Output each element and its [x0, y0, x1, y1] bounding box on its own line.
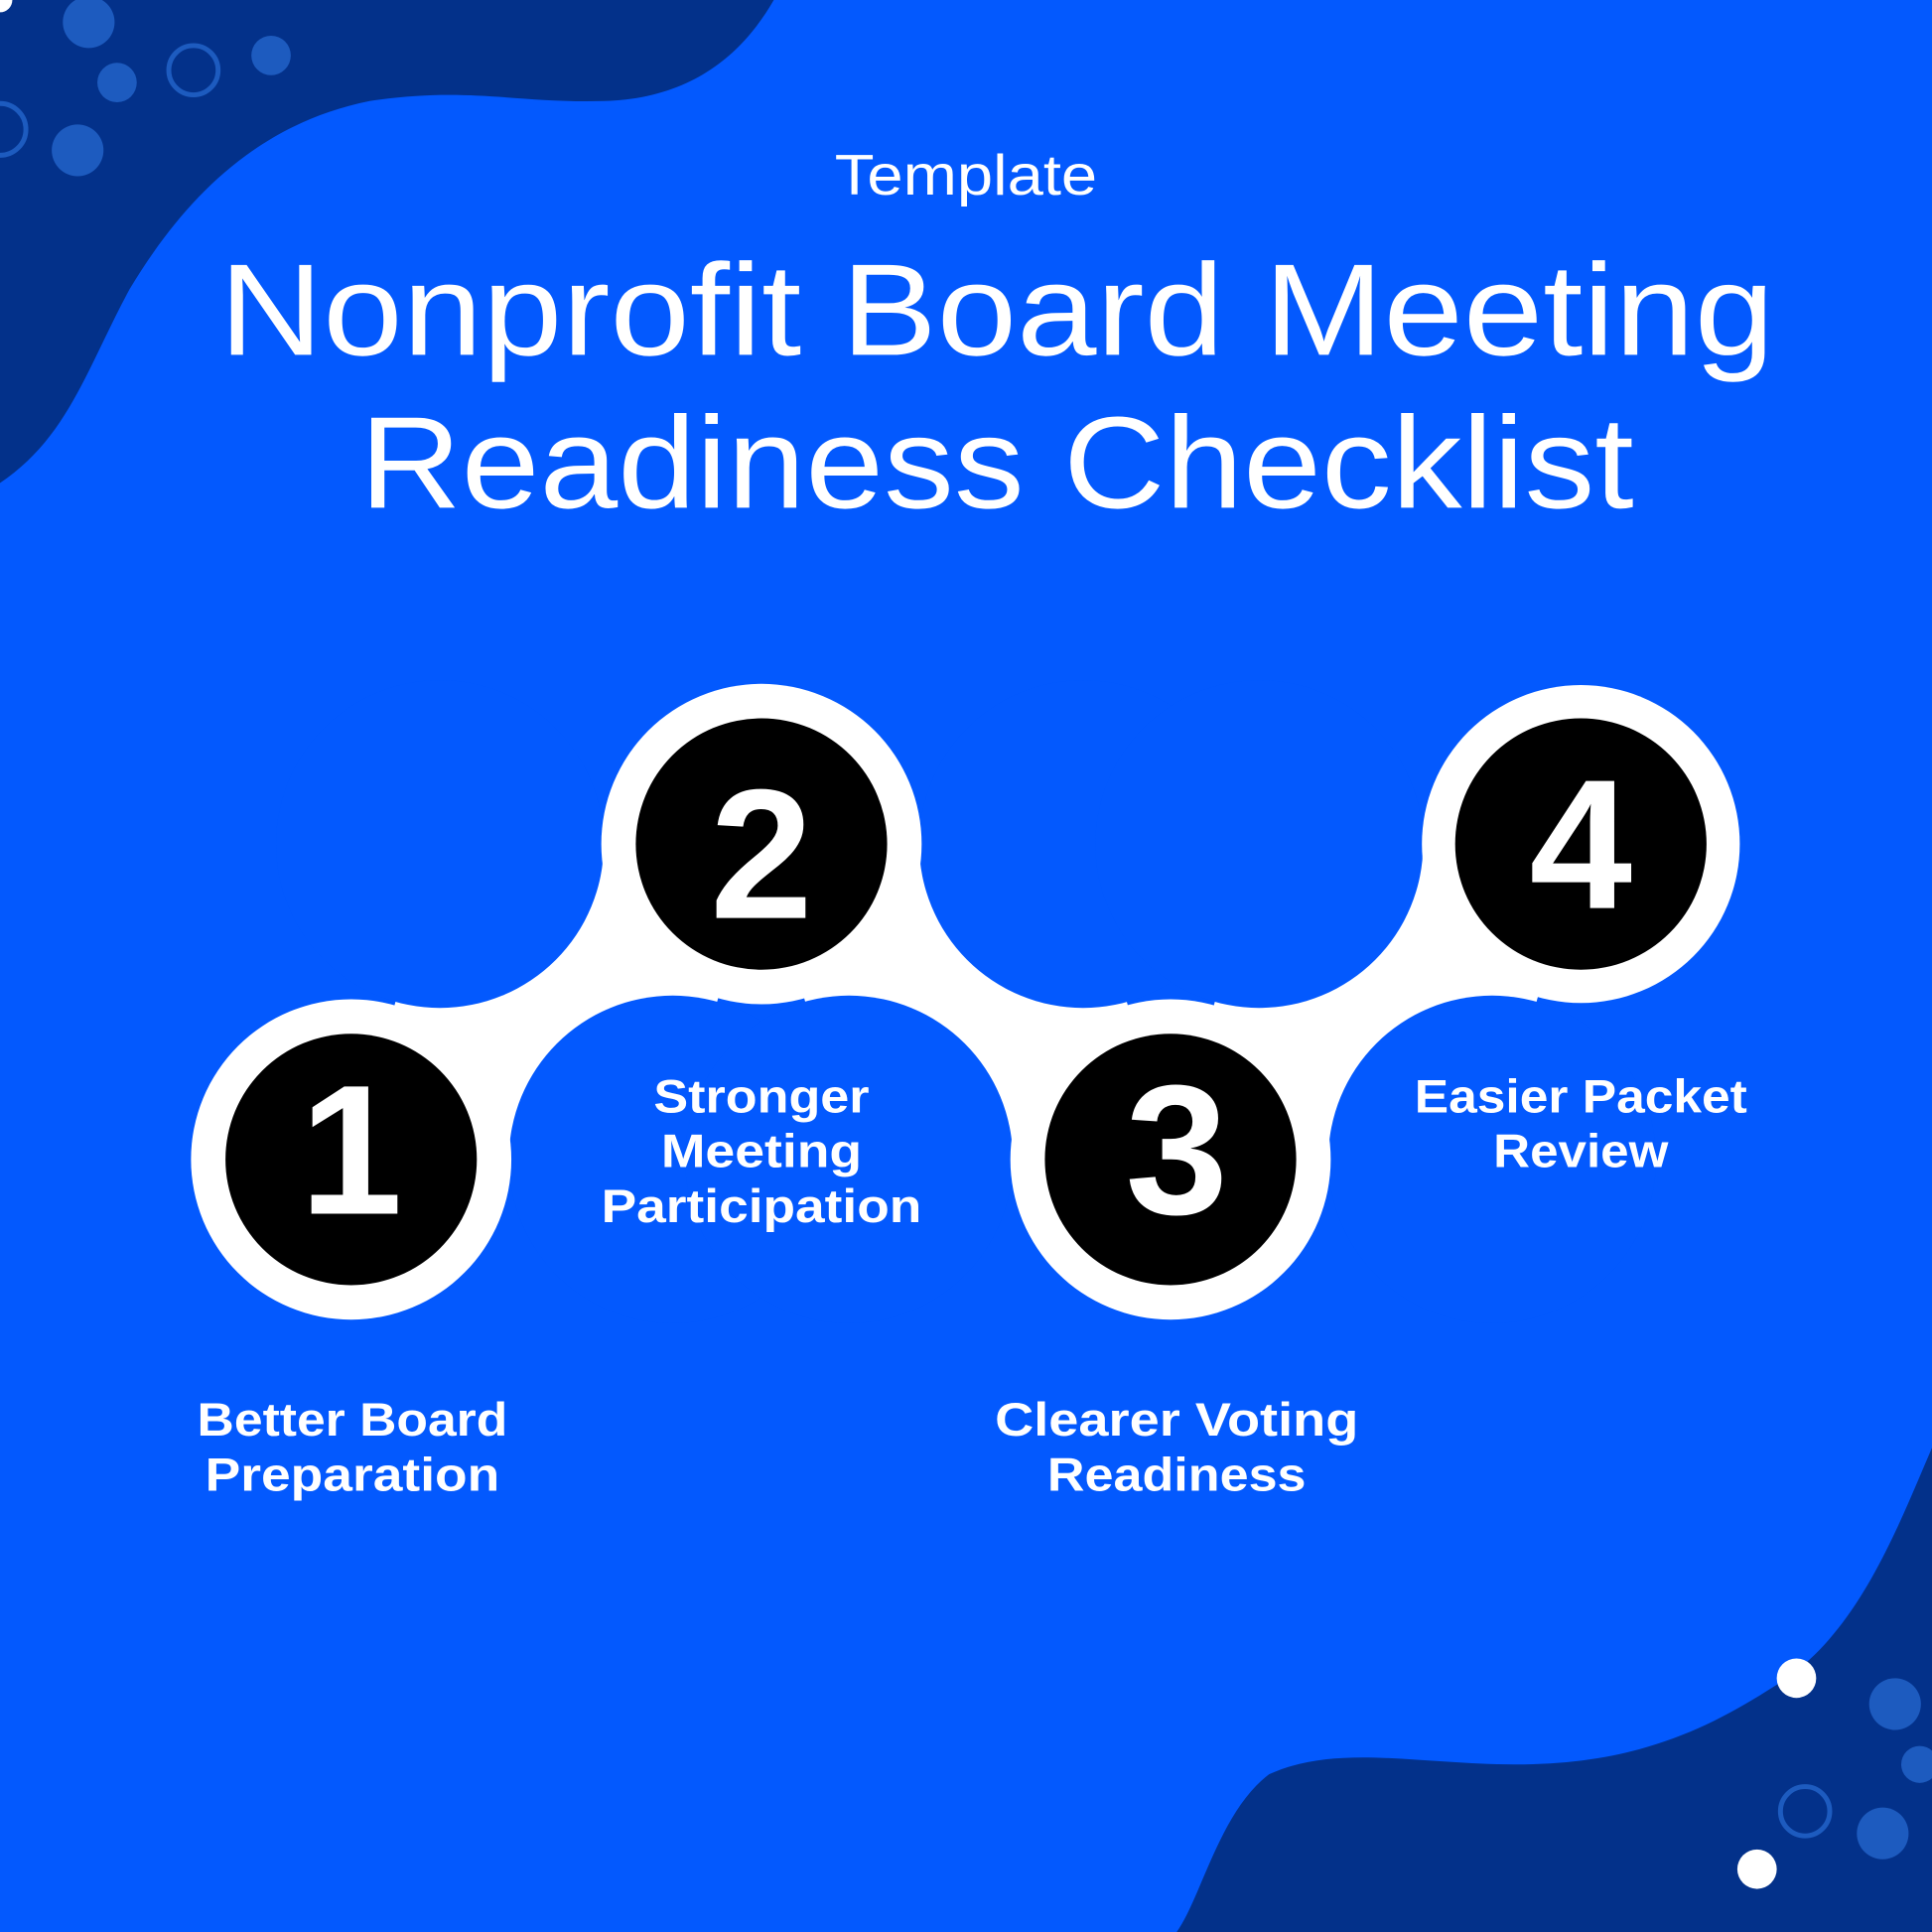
decoration: top-left dark wave: [0, 0, 773, 483]
label 2: [602, 1070, 921, 1232]
decoration: bottom-right dark wave: [1176, 1448, 1932, 1932]
step 1 badge: [225, 1034, 477, 1285]
title: Nonprofit Board Meeting: [219, 236, 1774, 382]
subtitle: Template: [835, 144, 1097, 207]
label 3: [995, 1393, 1358, 1501]
step 2 badge: [635, 719, 888, 970]
title: Readiness Checklist: [359, 389, 1634, 535]
label 2: Stronger: [653, 1070, 870, 1123]
title: [219, 236, 1774, 535]
step 4 badge: [1455, 719, 1707, 970]
label 3: Clearer Voting: [995, 1393, 1358, 1446]
label 4: [1415, 1070, 1747, 1176]
step 3 badge: [1044, 1034, 1297, 1285]
label 1: [198, 1393, 507, 1501]
label 1: Better Board: [198, 1393, 507, 1446]
step 2 badge: 2: [710, 752, 813, 958]
label 2: Participation: [602, 1179, 921, 1232]
label 2: Meeting: [661, 1124, 862, 1176]
step 3 badge: 3: [1125, 1046, 1228, 1253]
step 4 badge: 4: [1530, 742, 1632, 948]
step path: white wavy connector: [191, 680, 1739, 1323]
step 1 badge: 1: [300, 1046, 402, 1253]
label 4: Easier Packet: [1415, 1070, 1747, 1123]
label 1: Preparation: [206, 1449, 499, 1501]
label 4: Review: [1493, 1124, 1669, 1176]
label 3: Readiness: [1047, 1449, 1307, 1501]
